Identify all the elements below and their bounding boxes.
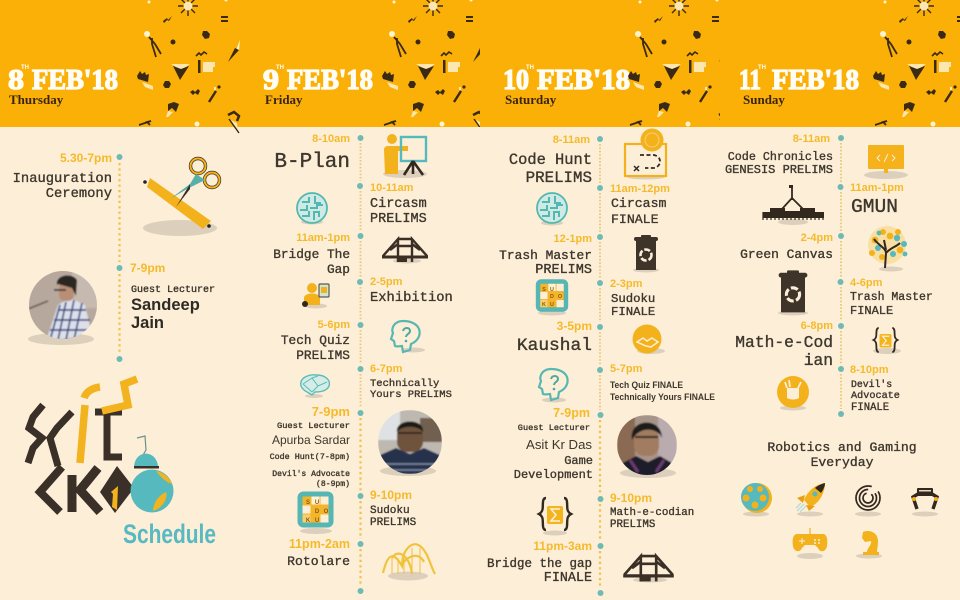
event: Circasm prelims: Circasm [370,197,427,212]
event: B-Plan [274,133,350,174]
icon: sigma braces [873,328,901,354]
event: inauguration [13,151,112,202]
event: Trash Master finale: FINALE [850,304,893,318]
icon: cup circle [777,376,809,410]
header: 10 Feb Saturday: Saturday [505,92,557,107]
icon: sudoku grid: D [550,294,554,300]
event: Math-e-codian prelims [610,491,694,531]
icon: sudoku grid [298,492,334,534]
event: guest lecturer [130,261,215,332]
event: Devil's Advocate finale [850,364,900,414]
header: 9 Feb Friday [263,65,373,107]
event: Code Hunt prelims: 8-11am [553,134,590,146]
event: Devil's Advocate finale: 8-10pm [850,364,889,376]
event: Math-e-Codian: Math-e-Cod [735,333,833,352]
event: Tech Quiz and Technically Yours finale: 5-7pm [610,363,643,375]
icon: recycling bin [778,270,808,316]
event: Bridge The Gap [273,232,350,277]
event: Circasm finale: Circasm [611,196,666,211]
heading: Schedule: Schedule [123,519,216,549]
event: Rotolare: 11pm-2am [289,537,350,551]
event: Trash Master finale: 4-6pm [850,277,883,289]
heading: Robotics and Gaming: Robotics and Gaming [767,440,917,455]
header: 8 Feb Thursday: FEB'18 [32,65,118,96]
icon: presenter [383,134,427,178]
event: Code Chronicles: Code Chronicles [728,150,833,164]
event: guest lecturer Asit Kr Das: Guest Lecturer [518,423,590,433]
event: Green Canvas: 2-4pm [801,232,833,244]
event: Kaushal [517,319,592,356]
event: Circasm prelims [370,182,427,227]
event: Sudoku finale: Sudoku [611,292,655,306]
header: 8 Feb Thursday: TH [21,65,29,71]
icon: maze [855,486,881,516]
icon: sudoku grid: S [306,500,310,506]
event: Exhibition: 2-5pm [370,276,403,288]
event: guest lecturer: 7-9pm [130,261,165,275]
header: 8 Feb Thursday [8,65,118,107]
icon: question head [391,321,425,352]
event: Code Chronicles [725,133,833,177]
event: Circasm prelims: 10-11am [370,182,414,194]
header: 11 Feb Sunday: Sunday [743,92,785,107]
event: Math-e-Codian: 6-8pm [801,320,833,332]
event: guest lecturer Apurba Sardar: Guest Lecturer [277,421,350,431]
heading: Robotics and Gaming: Everyday [811,455,874,470]
icon: parliament [763,185,824,225]
panel: 9 Feb schedule [270,133,453,594]
icon: question head [539,369,568,402]
event: guest lecturer Apurba Sardar: 7-9pm [312,404,350,419]
event: guest lecturer Asit Kr Das [514,406,593,482]
event: B-Plan: 8-10am [312,133,350,145]
event: Technically Yours prelims: Yours PRELIMS [370,389,452,401]
event: Bridge The Gap: Bridge The [273,247,350,262]
event: Bridge the gap finale: Bridge the gap [487,557,592,571]
header: 8 Feb Thursday: Thursday [9,92,64,107]
icon: sigma braces [539,498,571,536]
event: Code Hunt prelims: Code Hunt [509,151,592,169]
icon: robot claw [912,488,938,516]
event: Code Hunt prelims: PRELIMS [526,169,592,187]
event: Sudoku prelims: 9-10pm [370,488,412,502]
event: Bridge The Gap: Gap [327,262,350,277]
event: GMUN [850,182,904,218]
event: Sudoku prelims [370,488,417,529]
event: Sudoku prelims: PRELIMS [370,517,417,529]
event: Trash Master prelims: Trash Master [499,248,592,263]
logo: festival mark [28,379,216,549]
icon: recycling bin [633,235,659,272]
event: Bridge the gap finale [487,539,592,586]
event: guest lecturer Asit Kr Das: Development [514,468,593,482]
header: 10 Feb Saturday [503,65,630,107]
event: inauguration: Inauguration [13,171,112,187]
header: 10 Feb Saturday: 10 [503,65,529,96]
icon: sudoku grid: O [558,294,562,300]
event: guest lecturer Apurba Sardar: Devil's Advocate [272,470,350,479]
event: Trash Master prelims: PRELIMS [535,263,592,278]
icon: sudoku grid: K [306,518,311,524]
photo: Asit Kr Das [617,415,677,478]
icon: ribbon and scissors [143,158,220,236]
event: Tech Quiz prelims: PRELIMS [296,348,350,363]
event: Math-e-Codian [735,320,833,370]
event: guest lecturer: Guest Lecturer [131,285,215,296]
event: Circasm finale: 11am-12pm [610,183,670,195]
event: Tech Quiz and Technically Yours finale: Tech Quiz FINALE [610,380,683,390]
header: 10 Feb Saturday: TH [526,65,534,71]
icon: chess knight [856,531,882,558]
event: Bridge the gap finale: 11pm-3am [533,539,592,553]
event: Rotolare [287,537,350,569]
icon: sudoku grid: K [542,302,546,308]
event: B-Plan: B-Plan [274,151,350,174]
panel: Robotics and Gaming [741,440,938,559]
event: guest lecturer Apurba Sardar: Apurba Sardar [272,433,350,447]
event: Math-e-codian prelims: PRELIMS [610,519,655,531]
event: GMUN: 11am-1pm [850,182,904,194]
panel: 10 Feb schedule [487,128,715,596]
icon: sudoku grid: U [315,500,319,506]
icon: exhibitor with card [302,283,329,308]
event: guest lecturer: Jain [131,314,164,332]
header: 9 Feb Friday: TH [276,65,284,71]
event: Sudoku finale [610,278,655,319]
event: Devil's Advocate finale: Devil's [851,379,892,390]
heading: Robotics and Gaming [767,440,917,470]
icon: sudoku grid: U [550,302,554,308]
event: Code Chronicles: GENESIS PRELIMS [725,163,833,177]
event: Tech Quiz and Technically Yours finale [610,363,715,402]
icon: circuit brain [297,193,327,224]
event: Circasm finale: FINALE [611,212,659,227]
event: Sudoku finale: FINALE [611,305,655,319]
header: 9 Feb Friday: Friday [265,92,303,107]
event: guest lecturer Asit Kr Das: Game [564,454,593,468]
event: Circasm prelims: PRELIMS [370,212,427,227]
event: guest lecturer Asit Kr Das: Asit Kr Das [526,437,592,452]
event: Technically Yours prelims: Technically [370,378,439,390]
header: 9 Feb Friday: 9 [263,65,279,96]
header: 8 Feb Thursday: 8 [8,65,24,96]
event: guest lecturer Apurba Sardar [270,404,350,489]
icon: bridge [623,556,674,582]
icon: handshake [632,324,665,354]
event: Sudoku prelims: Sudoku [370,505,410,517]
panel: header band [0,0,960,133]
event: guest lecturer: Sandeep [131,296,200,314]
event: Rotolare: Rotolare [287,554,350,569]
event: guest lecturer Asit Kr Das: 7-9pm [553,406,590,420]
event: guest lecturer Apurba Sardar: Code Hunt(7-8pm) [270,452,350,462]
icon: roller coaster [383,544,435,580]
icon: code monitor [864,145,908,179]
event: Code Chronicles: 8-11am [793,133,830,145]
event: Devil's Advocate finale: FINALE [851,402,889,414]
event: Green Canvas [740,232,833,262]
icon: treasure map [625,128,666,180]
panel: 8 Feb schedule [13,151,220,549]
decoration: confetti pattern [137,0,960,133]
event: Trash Master finale: Trash Master [850,291,933,304]
icon: gamepad [793,528,827,559]
event: Bridge the gap finale: FINALE [544,571,592,586]
photo: Apurba Sardar [378,410,442,476]
event: Tech Quiz and Technically Yours finale: Technically Yours FINALE [610,392,715,402]
event: Technically Yours prelims: 6-7pm [370,363,403,375]
icon: bridge [382,239,428,264]
icon: circuit brain [537,193,567,226]
header: 11 Feb Sunday: FEB'18 [772,65,859,96]
event: Kaushal: Kaushal [517,336,592,356]
header: 10 Feb Saturday: FEB'18 [537,65,630,96]
event: Tech Quiz prelims: 5-6pm [318,319,350,331]
icon: sudoku grid: D [315,509,320,515]
header: 9 Feb Friday: FEB'18 [287,65,373,96]
icon: sudoku grid: O [324,509,329,515]
icon: sudoku grid: U [315,518,319,524]
event: Trash Master prelims [499,233,592,278]
event: GMUN: GMUN [851,196,898,218]
event: inauguration: Ceremony [46,187,112,202]
icon: sudoku grid: S [542,287,546,293]
event: Math-e-codian prelims: Math-e-codian [610,507,694,519]
icon: colourful tree [868,226,907,272]
event: Circasm finale [610,183,670,227]
event: Trash Master finale [850,277,933,318]
event: Kaushal: 3-5pm [557,319,592,333]
event: Math-e-codian prelims: 9-10pm [610,491,652,505]
icon: robot mascot [130,436,174,512]
icon: sudoku grid: U [550,287,554,293]
event: Exhibition: Exhibition [370,290,453,306]
icon: football [741,483,772,516]
event: guest lecturer Apurba Sardar: (8-9pm) [316,480,350,489]
header: 11 Feb Sunday: 11 [739,65,761,96]
icon: network brain [301,375,329,398]
header: 11 Feb Sunday: TH [758,65,766,71]
event: Bridge The Gap: 11am-1pm [296,232,350,244]
icon: sudoku grid [536,279,568,316]
event: Devil's Advocate finale: Advocate [851,390,900,402]
icon: rocket [796,483,825,516]
panel: 11 Feb schedule [725,133,938,559]
event: Tech Quiz prelims [281,319,350,363]
header: 11 Feb Sunday [739,65,859,107]
event: Exhibition [370,276,453,306]
event: inauguration: 5.30-7pm [60,151,112,165]
event: Math-e-Codian: ian [804,351,833,370]
event: Green Canvas: Green Canvas [740,247,833,262]
event: Tech Quiz prelims: Tech Quiz [281,333,350,348]
event: Sudoku finale: 2-3pm [610,278,643,290]
event: Technically Yours prelims [370,363,452,401]
event: Trash Master prelims: 12-1pm [553,233,592,245]
event: Code Hunt prelims [509,134,592,187]
photo: Sandeep Jain [28,271,97,345]
